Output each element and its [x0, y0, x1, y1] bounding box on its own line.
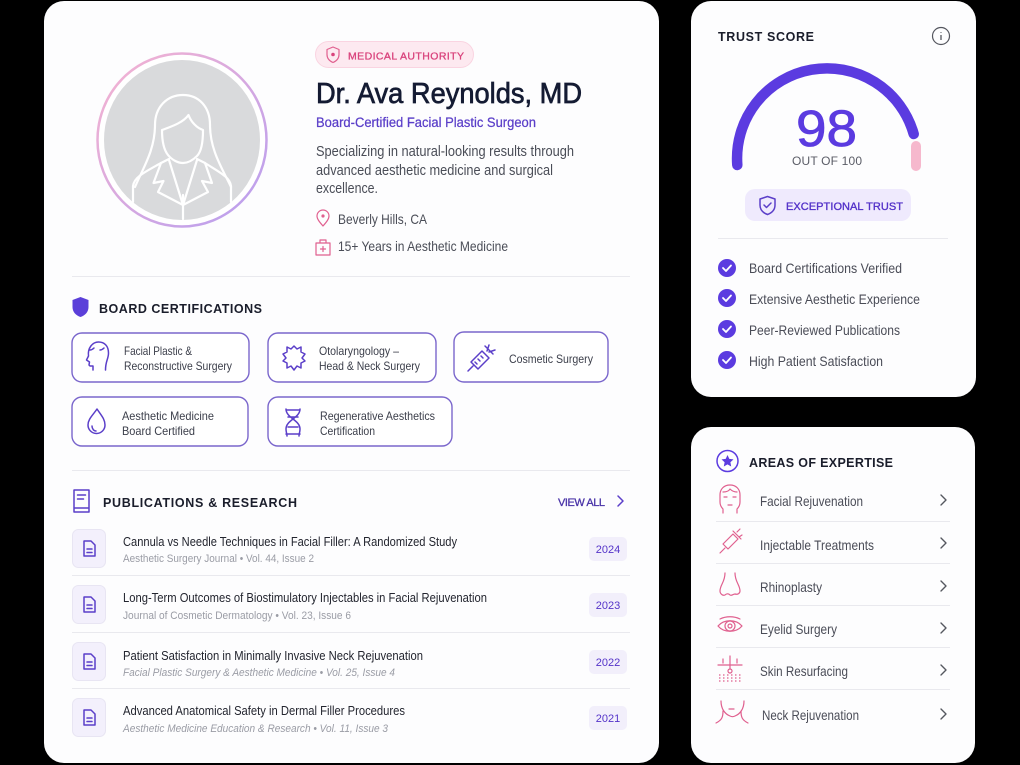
card: aesthetic medicine	[72, 397, 248, 446]
description: excellence.	[316, 181, 378, 197]
publication 2021	[72, 698, 627, 736]
publication 2023	[72, 586, 627, 624]
trust item: peer-reviewed publications	[718, 320, 900, 338]
item: injectable treatments: Injectable Treatments	[760, 537, 874, 553]
panel: trust score	[691, 1, 976, 397]
publication 2022	[72, 642, 627, 680]
card: otolaryngology: Otolaryngology –	[319, 344, 399, 358]
icon: info	[932, 28, 950, 44]
trust item: extensive experience: Extensive Aesthetic Experience	[749, 291, 920, 307]
card: facial plastic: Reconstructive Surgery	[124, 359, 232, 373]
specialty subtitle: Board-Certified Facial Plastic Surgeon	[316, 115, 536, 130]
item: skin resurfacing	[718, 656, 946, 681]
badge: medical authority: MEDICAL AUTHORITY	[348, 50, 464, 62]
item: rhinoplasty: Rhinoplasty	[760, 579, 822, 595]
icon: shield	[72, 297, 88, 317]
card: otolaryngology	[268, 333, 436, 382]
description: advanced aesthetic medicine and surgical	[316, 163, 553, 179]
publication 2022: Patient Satisfaction in Minimally Invasive Neck Rejuvenation	[123, 648, 423, 663]
description	[316, 144, 574, 197]
card: regenerative aesthetics: Regenerative Aesthetics	[320, 409, 435, 423]
link: view all: VIEW ALL	[558, 497, 605, 509]
section: board certifications	[72, 297, 608, 446]
item: facial rejuvenation	[720, 485, 946, 513]
trust item: high patient satisfaction	[718, 351, 883, 369]
item: neck rejuvenation: Neck Rejuvenation	[762, 707, 859, 723]
heading: board certifications: BOARD CERTIFICATIONS	[99, 302, 262, 316]
heading: publications: PUBLICATIONS & RESEARCH	[103, 496, 297, 510]
experience: 15+ Years in Aesthetic Medicine	[338, 238, 508, 254]
card: cosmetic surgery	[454, 332, 608, 382]
panel: doctor profile	[44, 1, 659, 763]
badge: exceptional trust	[745, 189, 911, 221]
card: facial plastic	[72, 333, 249, 382]
card: regenerative aesthetics: Certification	[320, 424, 375, 438]
publication 2022: Facial Plastic Surgery & Aesthetic Medicine • Vol. 25, Issue 4	[123, 667, 395, 679]
item: rhinoplasty	[720, 573, 946, 595]
publication 2024: 2024	[596, 544, 620, 556]
trust item: high patient satisfaction: High Patient Satisfaction	[749, 353, 883, 369]
badge: medical authority	[316, 42, 474, 68]
item: neck rejuvenation	[716, 701, 946, 723]
gauge: score 98 out of 100: OUT OF 100	[792, 154, 862, 168]
item: skin resurfacing: Skin Resurfacing	[760, 663, 848, 679]
avatar portrait	[98, 54, 266, 226]
link: view all	[558, 496, 623, 509]
item: eyelid surgery	[718, 617, 946, 637]
gauge: score 98 out of 100	[737, 68, 921, 171]
publication 2024	[72, 530, 627, 568]
publication 2022: 2022	[596, 657, 620, 669]
trust item: board certifications verified: Board Certifications Verified	[749, 260, 902, 276]
icon: star badge	[717, 450, 738, 472]
item: injectable treatments	[720, 529, 946, 553]
publication 2024: Aesthetic Surgery Journal • Vol. 44, Issue 2	[123, 553, 314, 565]
panel: areas of expertise	[691, 427, 975, 763]
publication 2023: Journal of Cosmetic Dermatology • Vol. 23, Issue 6	[123, 610, 351, 622]
card: aesthetic medicine: Aesthetic Medicine	[122, 409, 214, 423]
card: aesthetic medicine: Board Certified	[122, 424, 195, 438]
location	[317, 210, 428, 227]
publication 2023: 2023	[596, 600, 620, 612]
publication 2023: Long-Term Outcomes of Biostimulatory Injectables in Facial Rejuvenation	[123, 590, 487, 605]
item: facial rejuvenation: Facial Rejuvenation	[760, 493, 863, 509]
heading: trust score: TRUST SCORE	[718, 30, 814, 44]
trust item: board certifications verified	[718, 259, 902, 277]
trust item: extensive experience	[718, 289, 920, 307]
publication 2021: Advanced Anatomical Safety in Dermal Filler Procedures	[123, 703, 405, 718]
trust item: peer-reviewed publications: Peer-Reviewed Publications	[749, 322, 900, 338]
publication 2021: Aesthetic Medicine Education & Research • Vol. 11, Issue 3	[122, 723, 389, 735]
location: Beverly Hills, CA	[338, 211, 428, 227]
publication 2024: Cannula vs Needle Techniques in Facial Filler: A Randomized Study	[123, 534, 457, 549]
description: Specializing in natural-looking results through	[316, 144, 574, 160]
card: facial plastic: Facial Plastic &	[124, 344, 192, 358]
card: cosmetic surgery: Cosmetic Surgery	[509, 352, 593, 366]
gauge: score 98 out of 100: 98	[796, 100, 857, 157]
badge: exceptional trust: EXCEPTIONAL TRUST	[786, 201, 903, 213]
card: otolaryngology: Head & Neck Surgery	[319, 359, 420, 373]
icon: book	[74, 490, 89, 512]
publication 2021: 2021	[596, 713, 620, 725]
section: publications and research	[72, 490, 630, 736]
card: regenerative aesthetics	[268, 397, 452, 446]
heading: areas of expertise: AREAS OF EXPERTISE	[749, 456, 893, 470]
doctor name: Dr. Ava Reynolds, MD	[316, 78, 582, 110]
item: eyelid surgery: Eyelid Surgery	[760, 621, 837, 637]
